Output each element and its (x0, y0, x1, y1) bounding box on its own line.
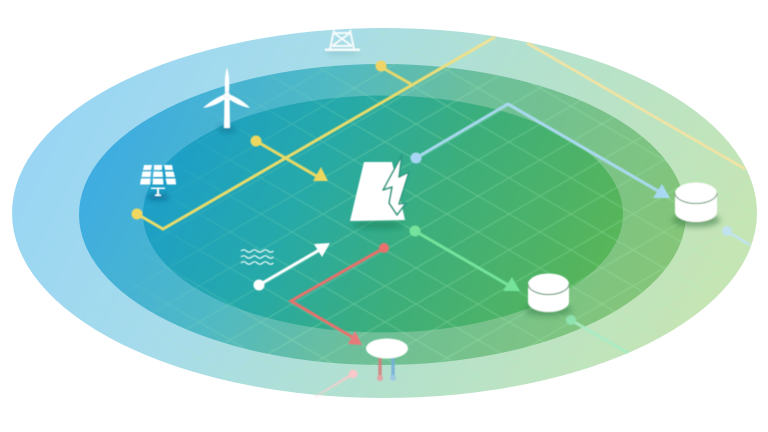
consumer node (366, 338, 408, 358)
icon: wind turbine (203, 68, 250, 132)
inner disc (143, 96, 623, 332)
pale red line (315, 370, 358, 397)
foreground diagram (132, 30, 750, 397)
isometric grid (167, 64, 681, 364)
yellow arrow to power station (250, 136, 328, 181)
green arrow to storage (410, 226, 520, 291)
yellow branch from tower (376, 60, 411, 84)
red and blue feed lines (377, 358, 396, 381)
pale blue line (722, 226, 750, 245)
pale yellow line (527, 43, 745, 169)
red line to consumer (291, 243, 389, 345)
blue line to storage (410, 104, 670, 198)
icon: transmission tower (325, 30, 360, 54)
pale green line (566, 315, 628, 353)
middle disc (79, 64, 686, 365)
yellow main line (132, 37, 495, 229)
white arrow from hydro (254, 243, 330, 290)
icon: power station (350, 155, 409, 229)
icon: storage cylinder right (672, 182, 720, 227)
icon: solar panel (140, 165, 176, 200)
icon: water waves (241, 250, 273, 264)
icon: storage cylinder left (524, 274, 572, 316)
